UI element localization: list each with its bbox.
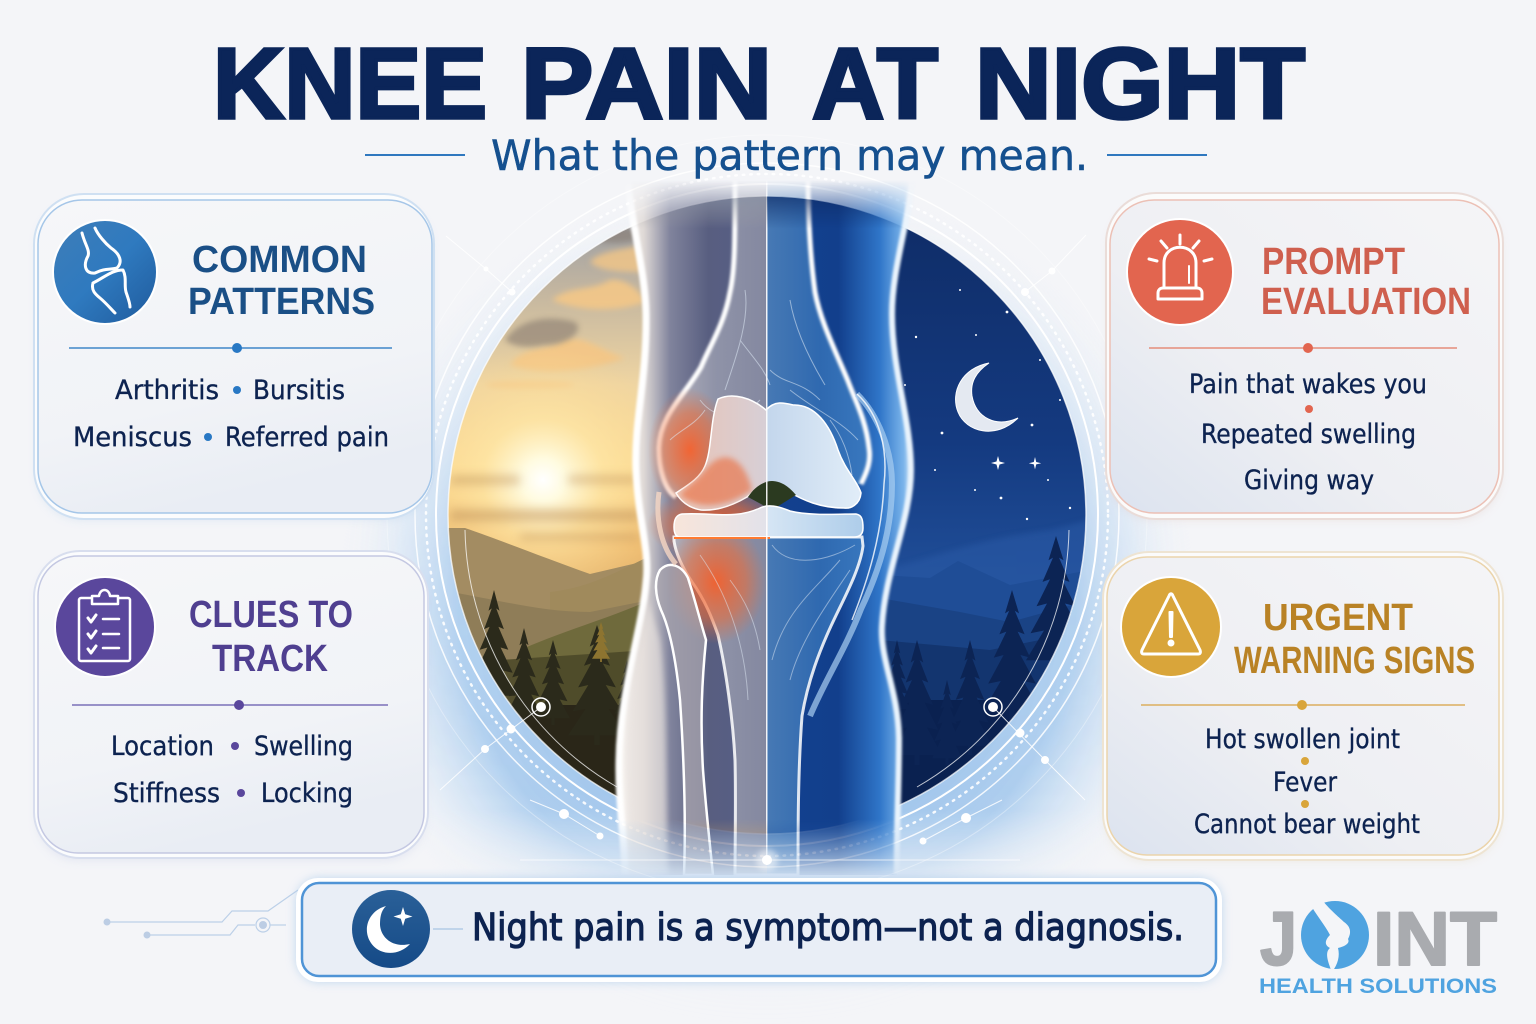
list of patterns: Bursitis xyxy=(253,375,345,406)
heading: CLUES TO xyxy=(189,594,353,636)
meniscus xyxy=(674,506,863,537)
title: KNEE xyxy=(213,28,487,140)
circuit decoration xyxy=(104,890,298,938)
heading: COMMON xyxy=(192,239,367,281)
panel: clues to track xyxy=(34,551,428,860)
list of warning signs: Cannot bear weight xyxy=(1194,809,1420,840)
list of clues xyxy=(111,731,353,809)
divider xyxy=(1141,700,1465,710)
lower leg soft tissue highlight xyxy=(644,608,670,870)
orbital rings xyxy=(387,135,1147,895)
divider xyxy=(1149,343,1457,353)
list of prompt signs: Pain that wakes you xyxy=(1189,369,1427,400)
logo: Joint Health Solutions xyxy=(1259,897,1497,998)
list of warning signs: Hot swollen joint xyxy=(1205,724,1400,755)
divider xyxy=(72,700,388,710)
banner connector xyxy=(433,928,463,930)
subtitle: What the pattern may mean. xyxy=(491,131,1088,180)
icon: moon and star xyxy=(352,890,430,968)
list of prompt signs xyxy=(1189,369,1427,496)
heading: PATTERNS xyxy=(188,281,375,323)
heading: URGENT xyxy=(1263,597,1413,639)
list of clues: Swelling xyxy=(254,731,353,762)
heading xyxy=(1261,241,1471,323)
list of clues: Stiffness xyxy=(113,778,220,809)
base star glow xyxy=(520,849,1020,871)
femur xyxy=(648,175,870,512)
list of patterns: Meniscus xyxy=(73,422,192,453)
heading xyxy=(188,239,375,323)
night landscape xyxy=(765,190,1100,840)
title: AT xyxy=(812,28,938,140)
leg silhouette xyxy=(619,175,913,875)
fibula xyxy=(656,565,713,875)
knee anatomy illustration xyxy=(619,175,913,875)
list of warning signs xyxy=(1194,724,1420,840)
heading xyxy=(1234,597,1475,682)
panel: prompt evaluation xyxy=(1106,193,1503,519)
sunrise landscape xyxy=(448,196,767,834)
logo: Joint Health Solutions: J xyxy=(1260,897,1297,982)
central divider line xyxy=(766,175,768,865)
list of warning signs: Fever xyxy=(1273,767,1338,798)
logo: Joint Health Solutions: INT xyxy=(1373,897,1497,982)
banner: key message xyxy=(296,878,1222,982)
heading: PROMPT xyxy=(1262,241,1405,283)
title: NIGHT xyxy=(975,28,1305,140)
logo: Joint Health Solutions: HEALTH SOLUTIONS xyxy=(1259,975,1497,998)
logo: Joint Health Solutions: O xyxy=(1305,897,1365,982)
network nodes xyxy=(440,235,1086,844)
panel: common patterns xyxy=(34,194,434,519)
banner text: Night pain is a symptom—not a diagnosis. xyxy=(472,906,1184,949)
heading: TRACK xyxy=(212,638,328,680)
title xyxy=(213,28,1305,140)
icon: crescent moon xyxy=(956,363,1018,431)
icon: knee joint xyxy=(53,220,157,324)
icon: alarm siren xyxy=(1127,219,1233,325)
femoral cartilage condyles xyxy=(676,396,861,510)
panel: urgent warning signs xyxy=(1103,552,1503,860)
heading xyxy=(189,594,353,680)
list of clues: Location xyxy=(111,731,214,762)
circular day and night scene xyxy=(387,135,1147,895)
icon: warning triangle xyxy=(1121,577,1221,677)
background glow behind knee scene xyxy=(375,277,1158,878)
list of patterns: Referred pain xyxy=(225,422,389,453)
knee ligaments xyxy=(810,394,892,716)
list of patterns: Arthritis xyxy=(115,375,219,406)
divider xyxy=(69,343,392,353)
list of patterns xyxy=(73,375,389,453)
heading: EVALUATION xyxy=(1261,281,1471,323)
list of clues: Locking xyxy=(261,778,353,809)
icon: clipboard checklist xyxy=(55,577,155,677)
title: PAIN xyxy=(521,28,772,140)
list of prompt signs: Repeated swelling xyxy=(1201,419,1416,450)
tibia and joint gap xyxy=(748,481,796,506)
list of prompt signs: Giving way xyxy=(1244,465,1374,496)
orange inflammation glow xyxy=(650,497,764,551)
